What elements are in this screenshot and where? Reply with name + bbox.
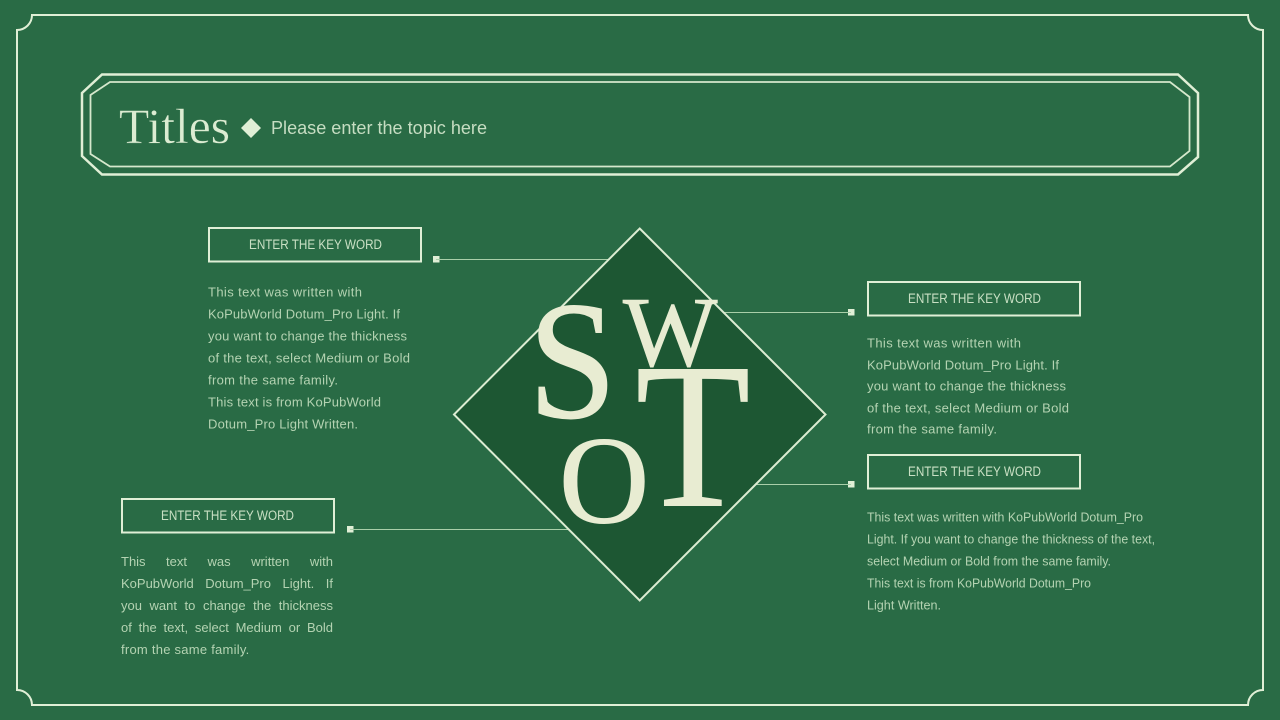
keyword box: bottom right [868,455,1080,488]
text block: top right: you want to change the thickness [867,378,1066,394]
text block: top left [208,284,410,432]
text block: bottom left: This text was written with [121,554,333,569]
SWOT diamond emblem [454,228,826,600]
text block: top left: of the text, select Medium or Bold [208,350,410,366]
text block: top left: This text is from KoPubWorld [208,394,381,410]
text block: top right [867,336,1069,436]
text block: bottom left: from the same family. [121,642,250,657]
keyword box: bottom left [122,499,334,532]
keyword box: top left [209,228,421,262]
text block: top left: KoPubWorld Dotum_Pro Light. If [208,306,400,322]
text block: top left: you want to change the thickness [208,328,408,344]
keyword box: top right: ENTER THE KEY WORD [908,291,1041,306]
connector: top left [433,256,612,262]
letter O: O [559,412,649,550]
connector: top right [720,309,854,316]
diamond [454,228,826,600]
text block: bottom right: This text was written with KoPubWorld Dotum_Pro [867,510,1143,524]
text block: top left: Dotum_Pro Light Written. [208,416,358,432]
text block: top left: This text was written with [208,284,362,300]
banner outer outline [82,74,1198,174]
text block: bottom right: Light Written. [867,598,941,612]
text block: bottom right: select Medium or Bold from the same family. [867,554,1111,568]
letter W: W [623,276,718,388]
banner inner outline [90,82,1190,166]
text block: top left: from the same family. [208,372,338,388]
keyword box: top right [868,282,1080,316]
text block: top right: This text was written with [867,336,1021,350]
title: Titles [119,98,230,154]
text block: bottom left [121,554,333,657]
connector: bottom right [750,481,854,488]
text block: top right: of the text, select Medium or Bold [867,400,1069,416]
keyword box: bottom right: ENTER THE KEY WORD [908,464,1041,479]
keyword box: bottom left: ENTER THE KEY WORD [161,508,294,523]
letter T: T [636,320,750,551]
keyword box: top left: ENTER THE KEY WORD [249,237,382,252]
title banner [82,74,1198,174]
text block: bottom right [867,510,1155,612]
text block: top right: from the same family. [867,422,997,436]
text block: bottom right: Light. If you want to change the thickness of the text, [867,532,1155,546]
text block: bottom left: KoPubWorld Dotum_Pro Light. If [121,576,333,591]
text block: bottom left: you want to change the thickness [121,598,333,613]
text block: top right: KoPubWorld Dotum_Pro Light. If [867,358,1059,372]
subtitle: Please enter the topic here [271,118,487,138]
letter S: S [528,269,616,454]
text block: bottom right: This text is from KoPubWorld Dotum_Pro [867,576,1091,590]
text block: bottom left: of the text, select Medium or Bold [121,620,333,635]
connector: bottom left [347,526,572,532]
icon: diamond bullet [241,118,261,138]
